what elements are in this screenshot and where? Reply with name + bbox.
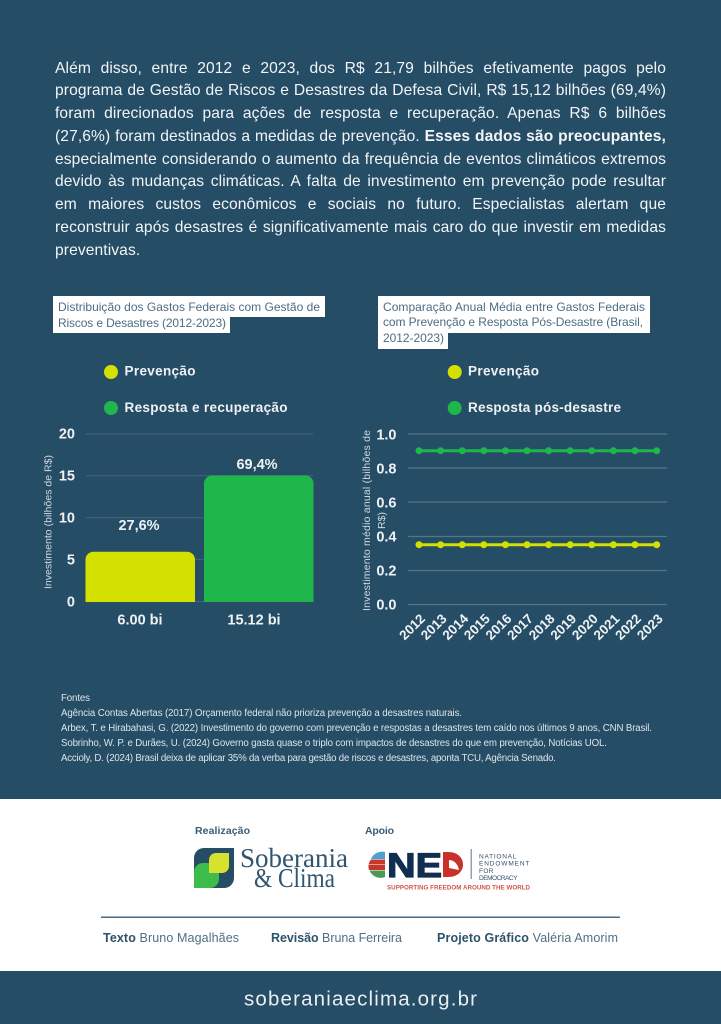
website footer: soberaniaeclima.org.br <box>244 988 477 1010</box>
line chart x axis years: 2017 <box>504 611 536 643</box>
logo: NED: SUPPORTING FREEDOM AROUND THE WORLD <box>387 884 531 892</box>
bar category labels: 6.00 bi <box>117 612 163 628</box>
bar chart legend: Resposta e recuperação <box>124 400 288 415</box>
line chart y axis labels: 0.4 <box>376 530 396 546</box>
bar chart title: Distribuição dos Gastos Federais com Gestão de <box>58 300 320 314</box>
bar chart y axis labels: 10 <box>59 510 75 526</box>
line chart x axis years: 2016 <box>483 611 515 643</box>
bar: resposta e recuperação <box>204 476 314 602</box>
credit: revisão: Revisão Bruna Ferreira <box>271 931 402 945</box>
line chart y axis title: Investimento médio anual (bilhões de <box>361 430 373 611</box>
bar category labels: 15.12 bi <box>227 612 281 628</box>
sources: Fontes <box>61 693 90 704</box>
bar value labels: 27,6% <box>118 518 160 534</box>
sources: Arbex, T. e Hirabahasi, G. (2022) Investimento do governo com prevenção e respostas a desastres tem caído nos últimos 9 anos, CNN Brasil. <box>61 723 652 734</box>
credit: texto: Texto Bruno Magalhães <box>103 931 239 945</box>
line chart y axis title: R$) <box>376 512 388 529</box>
sources <box>61 693 652 764</box>
logo: NED: NE <box>387 847 442 885</box>
logo: soberania e clima <box>194 843 348 893</box>
line chart legend: Resposta pós-desastre <box>468 400 621 415</box>
body paragraph: programa de Gestão de Riscos e Desastres da Defesa Civil, R$ 15,12 bilhões (69,4%) <box>55 82 666 99</box>
logo: NED: FOR <box>479 868 494 875</box>
body paragraph <box>55 60 666 258</box>
panel: bar chart distribution <box>42 296 325 628</box>
line chart x axis years: 2013 <box>418 611 450 643</box>
panel: credits band <box>0 799 721 971</box>
line chart title <box>378 296 650 349</box>
bar chart title <box>53 296 325 333</box>
bar chart y axis title: Investimento (bilhões de R$) <box>42 455 54 589</box>
bar value labels <box>118 457 278 534</box>
panel: line chart comparison <box>361 296 667 643</box>
line chart x axis years: 2023 <box>634 611 666 643</box>
divider rule <box>101 916 620 918</box>
logo: NED <box>368 847 531 892</box>
bar chart y axis labels: 15 <box>59 468 75 484</box>
sources: Sobrinho, W. P. e Durães, U. (2024) Governo gasta quase o triplo com impactos de desastres do que em prevenção, Notícias UOL. <box>61 738 607 749</box>
body paragraph: devido às mudanças climáticas. A falta de investimento em prevenção pode resultar <box>55 173 666 190</box>
body paragraph: (27,6%) foram destinados a medidas de prevenção. Esses dados são preocupantes, <box>55 128 666 145</box>
body paragraph: foram direcionados para ações de resposta e recuperação. Apenas R$ 6 bilhões <box>55 105 666 122</box>
line chart y axis labels: 0.6 <box>376 496 396 512</box>
line chart legend: Prevenção <box>468 364 539 378</box>
sources: Agência Contas Abertas (2017) Orçamento federal não prioriza prevenção a desastres naturais. <box>61 708 462 719</box>
sources: Accioly, D. (2024) Brasil deixa de aplicar 35% da verba para gestão de riscos e desastres, aponta TCU, Agência Senado. <box>61 753 556 764</box>
bar value labels: 69,4% <box>236 457 278 473</box>
bar: prevenção <box>86 552 195 602</box>
line: prevenção <box>416 541 660 548</box>
line chart title: Comparação Anual Média entre Gastos Federais <box>383 300 645 314</box>
logo: NED: ENDOWMENT <box>479 860 530 868</box>
line chart y axis labels: 0.2 <box>376 564 396 580</box>
line chart y axis title <box>361 430 388 611</box>
label: apoio: Apoio <box>365 825 394 837</box>
line chart y axis labels <box>376 428 396 614</box>
bar chart y axis labels: 5 <box>67 552 75 568</box>
bar chart y axis labels: 20 <box>59 426 75 442</box>
line chart x axis years: 2020 <box>569 611 601 643</box>
line chart y axis labels: 1.0 <box>376 428 396 444</box>
line: resposta pós-desastre <box>416 447 660 454</box>
line chart x axis years: 2012 <box>396 611 428 643</box>
body paragraph: em maiores custos econômicos e sociais no futuro. Especialistas alertam que <box>55 196 666 213</box>
bar chart y axis labels: 0 <box>67 594 75 610</box>
body paragraph: Além disso, entre 2012 e 2023, dos R$ 21,79 bilhões efetivamente pagos pelo <box>55 60 666 76</box>
body paragraph: especialmente considerando o aumento da frequência de eventos climáticos extremos <box>55 150 666 168</box>
line chart x axis years: 2019 <box>547 611 579 643</box>
bar chart y axis labels <box>59 426 75 610</box>
body paragraph: preventivas. <box>55 242 140 258</box>
body paragraph: reconstruir após desastres é significativamente mais caro do que investir em medidas <box>55 219 666 236</box>
bar chart legend: Prevenção <box>124 364 196 378</box>
credit: projeto gráfico: Projeto Gráfico Valéria Amorim <box>437 931 618 945</box>
label: realização: Realização <box>195 825 250 837</box>
line chart x axis years: 2022 <box>612 611 644 643</box>
line chart x axis years: 2021 <box>591 611 623 643</box>
logo: NED: NATIONAL <box>479 854 517 860</box>
bar chart gridlines <box>86 434 313 602</box>
logo: soberania e clima: & Clima <box>254 863 335 893</box>
line chart x axis years: 2014 <box>439 611 472 643</box>
logo: soberania e clima: Soberania <box>240 843 348 873</box>
line chart y axis labels: 0.8 <box>376 462 396 478</box>
line chart x axis years: 2018 <box>526 611 558 643</box>
line chart title: 2012-2023) <box>383 331 444 345</box>
bar chart legend <box>104 364 288 415</box>
line chart gridlines <box>408 434 667 604</box>
bar category labels <box>117 612 281 628</box>
line chart title: com Prevenção e Resposta Pós-Desastre (Brasil, <box>383 315 643 329</box>
logo: NED: DEMOCRACY <box>479 875 518 882</box>
line chart y axis labels: 0.0 <box>376 598 396 614</box>
bar chart title: Riscos e Desastres (2012-2023) <box>58 316 226 330</box>
line chart x axis years <box>396 611 666 643</box>
line chart legend <box>448 364 621 415</box>
line chart x axis years: 2015 <box>461 611 493 643</box>
